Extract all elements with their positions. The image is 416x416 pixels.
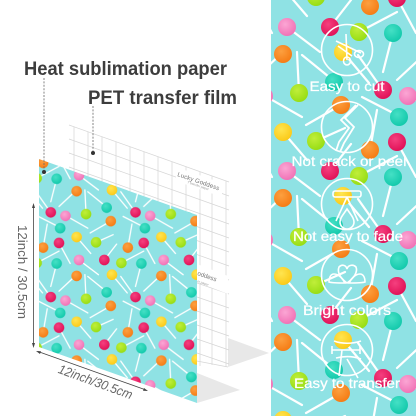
- second logo on film: er paper: [197, 279, 210, 287]
- film logo: Lucky Goddess: T transfer paper: [187, 180, 210, 192]
- text: Easy to transfer: Easy to transfer: [294, 375, 400, 391]
- width arrow: [36, 351, 148, 391]
- text: Not easy to fade: Not easy to fade: [293, 228, 403, 244]
- label: Heat sublimation paper: Heat sublimation paper: [24, 59, 228, 80]
- shadow: film sheet: [228, 338, 269, 367]
- icon: scissors: [322, 24, 372, 76]
- label: PET transfer film: PET transfer film: [88, 88, 237, 109]
- text: Bright colors: Bright colors: [303, 302, 391, 318]
- height arrow: [32, 203, 35, 348]
- second logo on film: [196, 264, 228, 294]
- icon: roller: [322, 178, 372, 230]
- shadow: paper sheet: [197, 373, 240, 403]
- height label: 12inch / 30.5cm: [15, 225, 30, 319]
- panel: features strip: [271, 0, 416, 416]
- heat sublimation paper sheet with lollipop pattern: [39, 159, 197, 403]
- icon: crack: [322, 102, 372, 152]
- film logo: Lucky Goddess: Lucky Goddess: [176, 171, 220, 192]
- film logo: Lucky Goddess: [176, 167, 222, 197]
- icon: transfer arrows: [322, 324, 372, 378]
- leader line: film: [91, 106, 95, 155]
- text: Easy to cut: Easy to cut: [310, 78, 385, 94]
- leader line: paper: [42, 78, 46, 174]
- text: Not crack or peel: Not crack or peel: [292, 153, 406, 169]
- width label: 12inch/30.5cm: [56, 361, 135, 402]
- PET transfer film grid sheet: [69, 125, 229, 367]
- second logo on film: oddess: [196, 270, 217, 283]
- icon: bright colors flower: [322, 250, 372, 300]
